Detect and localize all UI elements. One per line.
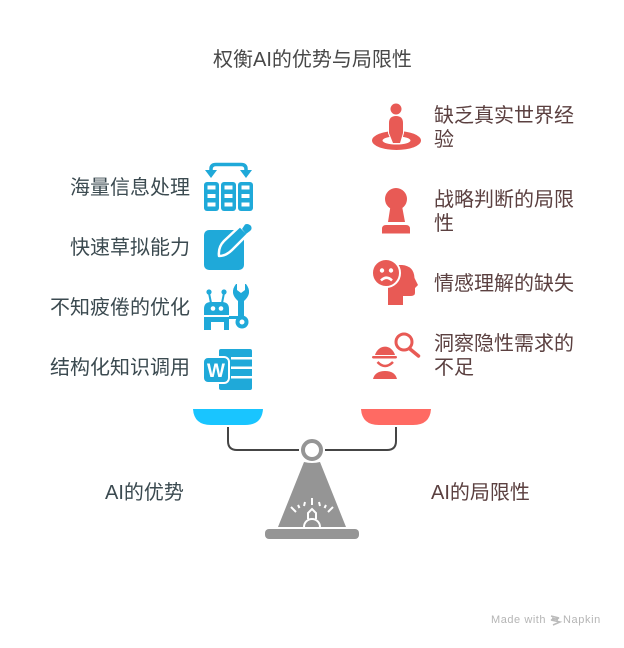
- icon: head with sad face: [372, 259, 418, 305]
- left text: 快速草拟能力: 快速草拟能力: [70, 237, 190, 259]
- right text: 缺乏真实世界经验: 缺乏真实世界经: [434, 105, 574, 127]
- right text: 洞察隐性需求的不足: 不足: [434, 357, 474, 379]
- right text: 缺乏真实世界经验: 验: [434, 129, 454, 151]
- icon: robot with wrench: [204, 284, 249, 330]
- icon: data columns with swap arrow: [204, 164, 253, 211]
- watermark: Made with: Made with: [491, 614, 546, 626]
- right text: 缺乏真实世界经验: [434, 105, 574, 151]
- title: 权衡AI的优势与局限性: [213, 49, 412, 71]
- icon: word document: W: [207, 361, 225, 382]
- right text: 战略判断的局限性: 战略判断的局限: [434, 189, 574, 211]
- scale: pivot ring: [303, 441, 321, 459]
- right text: 战略判断的局限性: 性: [434, 213, 454, 235]
- icon: person on target: [372, 104, 421, 150]
- scale: beam: [228, 427, 396, 450]
- icon: pencil on square: [204, 224, 252, 270]
- watermark logo mark: [551, 616, 560, 625]
- left text: 不知疲倦的优化: 不知疲倦的优化: [50, 297, 190, 319]
- right text: 洞察隐性需求的不足: [434, 333, 574, 379]
- left label: AI的优势: AI的优势: [105, 482, 184, 504]
- scale: stand with gauge: [265, 462, 359, 539]
- left text: 海量信息处理: 海量信息处理: [70, 177, 190, 199]
- icon: word document: [203, 349, 252, 390]
- right text: 战略判断的局限性: [434, 189, 574, 235]
- scale: left pan: [193, 409, 263, 425]
- icon: pawn: [382, 188, 410, 234]
- right text: 洞察隐性需求的不足: 洞察隐性需求的: [434, 333, 574, 355]
- watermark: Napkin: Napkin: [563, 614, 601, 626]
- right text: 情感理解的缺失: 情感理解的缺失: [434, 273, 574, 295]
- scale: right pan: [361, 409, 431, 425]
- icon: worker with magnifier: [372, 334, 418, 379]
- right label: AI的局限性: AI的局限性: [431, 482, 530, 504]
- left text: 结构化知识调用: 结构化知识调用: [50, 357, 190, 379]
